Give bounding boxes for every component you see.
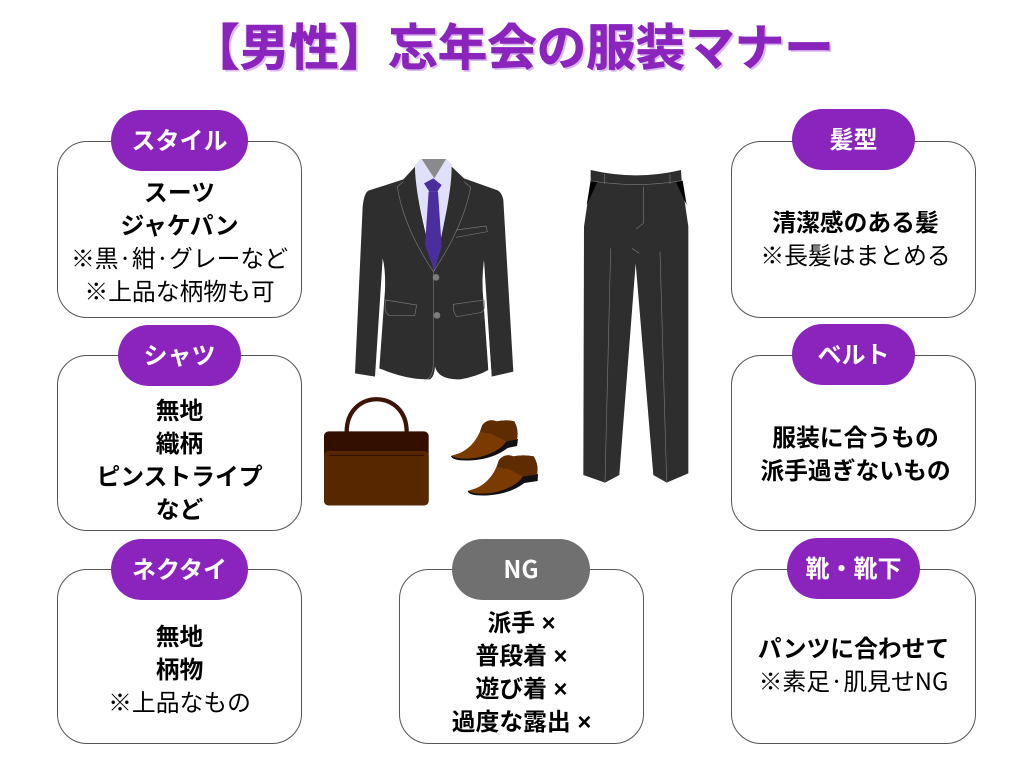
icon: trousers	[583, 170, 688, 483]
badge: belt: ベルト	[818, 335, 890, 370]
badge: shoes and socks	[787, 538, 920, 599]
panel: necktie	[57, 569, 302, 744]
text: style	[71, 173, 288, 307]
text: shoes and socks: ※素足·肌見せNG	[759, 662, 948, 697]
text: necktie: ※上品なもの	[108, 683, 251, 718]
badge: NG: NG	[503, 550, 539, 585]
text: NG: 過度な露出 ×	[452, 709, 591, 736]
icon: suit jacket	[355, 159, 513, 379]
text: hairstyle: ※長髪はまとめる	[760, 236, 951, 271]
icon: upper shoe	[451, 420, 518, 460]
text: shirt: ピンストライプ	[96, 457, 263, 492]
text: shirt: 織柄	[156, 424, 203, 459]
badge: shirt	[118, 325, 241, 386]
badge: shoes and socks: 靴・靴下	[806, 549, 902, 584]
panel: NG	[399, 569, 644, 744]
title: 【男性】忘年会の服装マナー	[190, 9, 834, 80]
text: hairstyle: 清潔感のある髪	[772, 203, 939, 238]
text: style: スーツ	[144, 173, 215, 208]
badge: shirt: シャツ	[144, 336, 216, 371]
text: style: ※上品な柄物も可	[84, 272, 275, 307]
text: NG	[452, 610, 591, 736]
panel: shoes and socks	[731, 569, 976, 744]
panel: style	[57, 141, 302, 318]
badge: NG	[452, 539, 590, 600]
icon: lower shoe	[468, 455, 538, 495]
panel: hairstyle	[731, 141, 976, 318]
badge: style	[111, 110, 248, 171]
badge: necktie: ネクタイ	[132, 550, 227, 585]
icon: briefcase	[324, 399, 429, 505]
text: style: ジャケパン	[120, 206, 239, 241]
text: NG: 遊び着 ×	[476, 676, 567, 703]
text: hairstyle	[760, 203, 951, 271]
text: shoes and socks: パンツに合わせて	[758, 629, 949, 664]
text: belt: 派手過ぎないもの	[760, 451, 951, 486]
text: necktie: 柄物	[156, 650, 203, 685]
text: shoes and socks	[758, 629, 949, 697]
panel: belt	[731, 355, 976, 531]
badge: necktie	[111, 539, 248, 600]
text: shirt: 無地	[156, 391, 203, 426]
text: shirt	[96, 391, 263, 525]
text: belt	[760, 418, 951, 486]
badge: belt	[792, 324, 915, 385]
text: NG: 派手 ×	[487, 610, 556, 637]
text: necktie	[108, 617, 251, 718]
text: NG: 普段着 ×	[476, 643, 567, 670]
badge: style: スタイル	[132, 121, 228, 156]
text: style: ※黒·紺·グレーなど	[71, 239, 288, 274]
panel: shirt	[57, 355, 302, 531]
icon: brown shoes	[451, 420, 538, 495]
badge: hairstyle	[792, 109, 915, 170]
badge: hairstyle: 髪型	[830, 120, 878, 155]
text: belt: 服装に合うもの	[772, 418, 939, 453]
text: necktie: 無地	[156, 617, 203, 652]
text: shirt: など	[156, 490, 203, 525]
